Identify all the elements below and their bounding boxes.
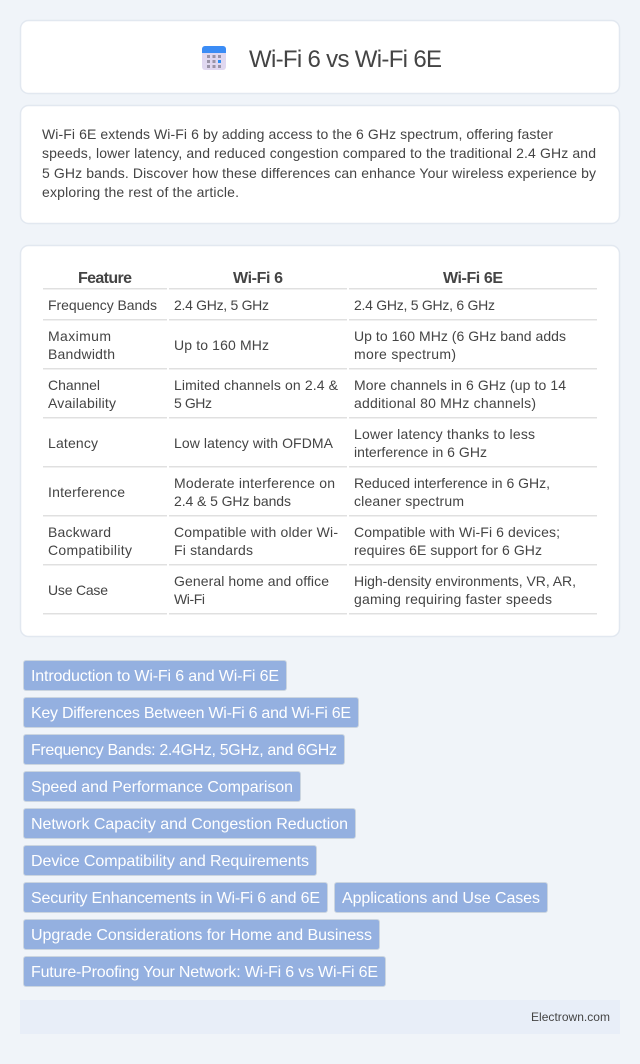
row: backward compatibility: Compatible with Wi-Fi 6 devices;: [354, 524, 560, 540]
tag: speed and performance: [24, 772, 300, 802]
row: backward compatibility: Compatible with older Wi-: [174, 524, 338, 540]
tag: future-proofing: Future-Proofing Your Network: Wi-Fi 6 vs Wi-Fi 6E: [31, 964, 378, 981]
row: backward compatibility: requires 6E support for 6 GHz: [354, 542, 542, 558]
panel: comparison table: [20, 246, 620, 636]
panel: header: [20, 20, 620, 94]
row: frequency bands: Frequency Bands: [48, 297, 157, 313]
row: frequency bands: 2.4 GHz, 5 GHz, 6 GHz: [354, 297, 495, 313]
row: latency: interference in 6 GHz: [354, 444, 487, 460]
row: latency: Latency: [48, 435, 98, 451]
row: maximum bandwidth: more spectrum): [354, 346, 456, 362]
row: channel availability: Channel: [48, 377, 100, 393]
row: interference: cleaner spectrum: [354, 493, 464, 509]
topic tags: [24, 660, 548, 986]
table header row: Wi-Fi 6: [233, 270, 283, 287]
tag: key differences: Key Differences Between Wi-Fi 6 and Wi-Fi 6E: [31, 705, 351, 722]
table header row: Feature: [78, 270, 132, 287]
row: use case: [43, 573, 597, 614]
row: frequency bands: [43, 297, 597, 320]
row: latency: Low latency with OFDMA: [174, 435, 334, 451]
icon: calendar grid: [202, 46, 226, 70]
row: interference: Interference: [48, 484, 125, 500]
tag: security enhancements: [24, 882, 328, 912]
row: backward compatibility: Backward: [48, 524, 111, 540]
tag: device compatibility: Device Compatibility and Requirements: [31, 853, 309, 870]
tag: security enhancements: Security Enhancements in Wi-Fi 6 and 6E: [31, 890, 320, 907]
intro text: speeds, lower latency, and reduced congestion compared to the traditional 2.4 GHz and: [42, 145, 596, 161]
row: backward compatibility: [43, 524, 597, 566]
tag: key differences: [24, 698, 358, 728]
row: maximum bandwidth: Maximum: [48, 328, 111, 344]
row: use case: gaming requiring faster speeds: [354, 591, 552, 607]
row: use case: High-density environments, VR, AR,: [354, 573, 576, 589]
tag: speed and performance: Speed and Performance Comparison: [31, 779, 293, 796]
row: channel availability: More channels in 6 GHz (up to 14: [354, 377, 566, 393]
row: interference: 2.4 & 5 GHz bands: [174, 493, 291, 509]
tag: future-proofing: [24, 956, 386, 986]
intro text: [42, 126, 596, 200]
panel: introduction: [20, 106, 620, 224]
table header row: [43, 270, 597, 290]
row: channel availability: [43, 377, 597, 418]
row: maximum bandwidth: [43, 328, 597, 370]
intro text: 5 GHz bands. Discover how these differences can enhance Your wireless experience by: [42, 165, 596, 181]
intro text: exploring the rest of the article.: [42, 184, 239, 200]
row: use case: General home and office: [174, 573, 329, 589]
tag: applications: [334, 882, 548, 912]
tag: frequency bands: [24, 734, 344, 764]
row: backward compatibility: Compatibility: [48, 542, 132, 558]
tag: network capacity: Network Capacity and Congestion Reduction: [31, 816, 348, 833]
tag: applications: Applications and Use Cases: [342, 890, 540, 907]
footer: Electrown.com: [531, 1010, 610, 1024]
row: backward compatibility: Fi standards: [174, 542, 253, 558]
row: use case: Wi-Fi: [174, 591, 205, 607]
tag: device compatibility: [24, 846, 316, 876]
row: maximum bandwidth: Up to 160 MHz: [174, 337, 269, 353]
table header row: Wi-Fi 6E: [443, 270, 503, 287]
row: interference: Reduced interference in 6 GHz,: [354, 475, 550, 491]
tag: introduction: Introduction to Wi-Fi 6 and Wi-Fi 6E: [31, 668, 279, 685]
intro text: Wi-Fi 6E extends Wi-Fi 6 by adding access to the 6 GHz spectrum, offering faster: [42, 126, 553, 142]
row: channel availability: 5 GHz: [174, 395, 212, 411]
footer: [20, 1000, 620, 1034]
tag: upgrade considerations: Upgrade Considerations for Home and Business: [31, 927, 372, 944]
row: channel availability: Limited channels on 2.4 &: [174, 377, 339, 393]
row: use case: Use Case: [48, 582, 108, 598]
row: maximum bandwidth: Up to 160 MHz (6 GHz band adds: [354, 328, 566, 344]
row: channel availability: additional 80 MHz channels): [354, 395, 536, 411]
row: interference: [43, 475, 597, 516]
row: latency: Lower latency thanks to less: [354, 426, 535, 442]
tag: upgrade considerations: [24, 920, 380, 950]
tag: introduction: [24, 660, 286, 690]
row: interference: Moderate interference on: [174, 475, 335, 491]
row: frequency bands: 2.4 GHz, 5 GHz: [174, 297, 269, 313]
row: channel availability: Availability: [48, 395, 116, 411]
row: latency: [43, 426, 597, 468]
tag: frequency bands: Frequency Bands: 2.4GHz, 5GHz, and 6GHz: [31, 742, 337, 759]
row: maximum bandwidth: Bandwidth: [48, 346, 115, 362]
tag: network capacity: [24, 808, 356, 838]
title: Wi-Fi 6 vs Wi-Fi 6E: [249, 46, 442, 73]
